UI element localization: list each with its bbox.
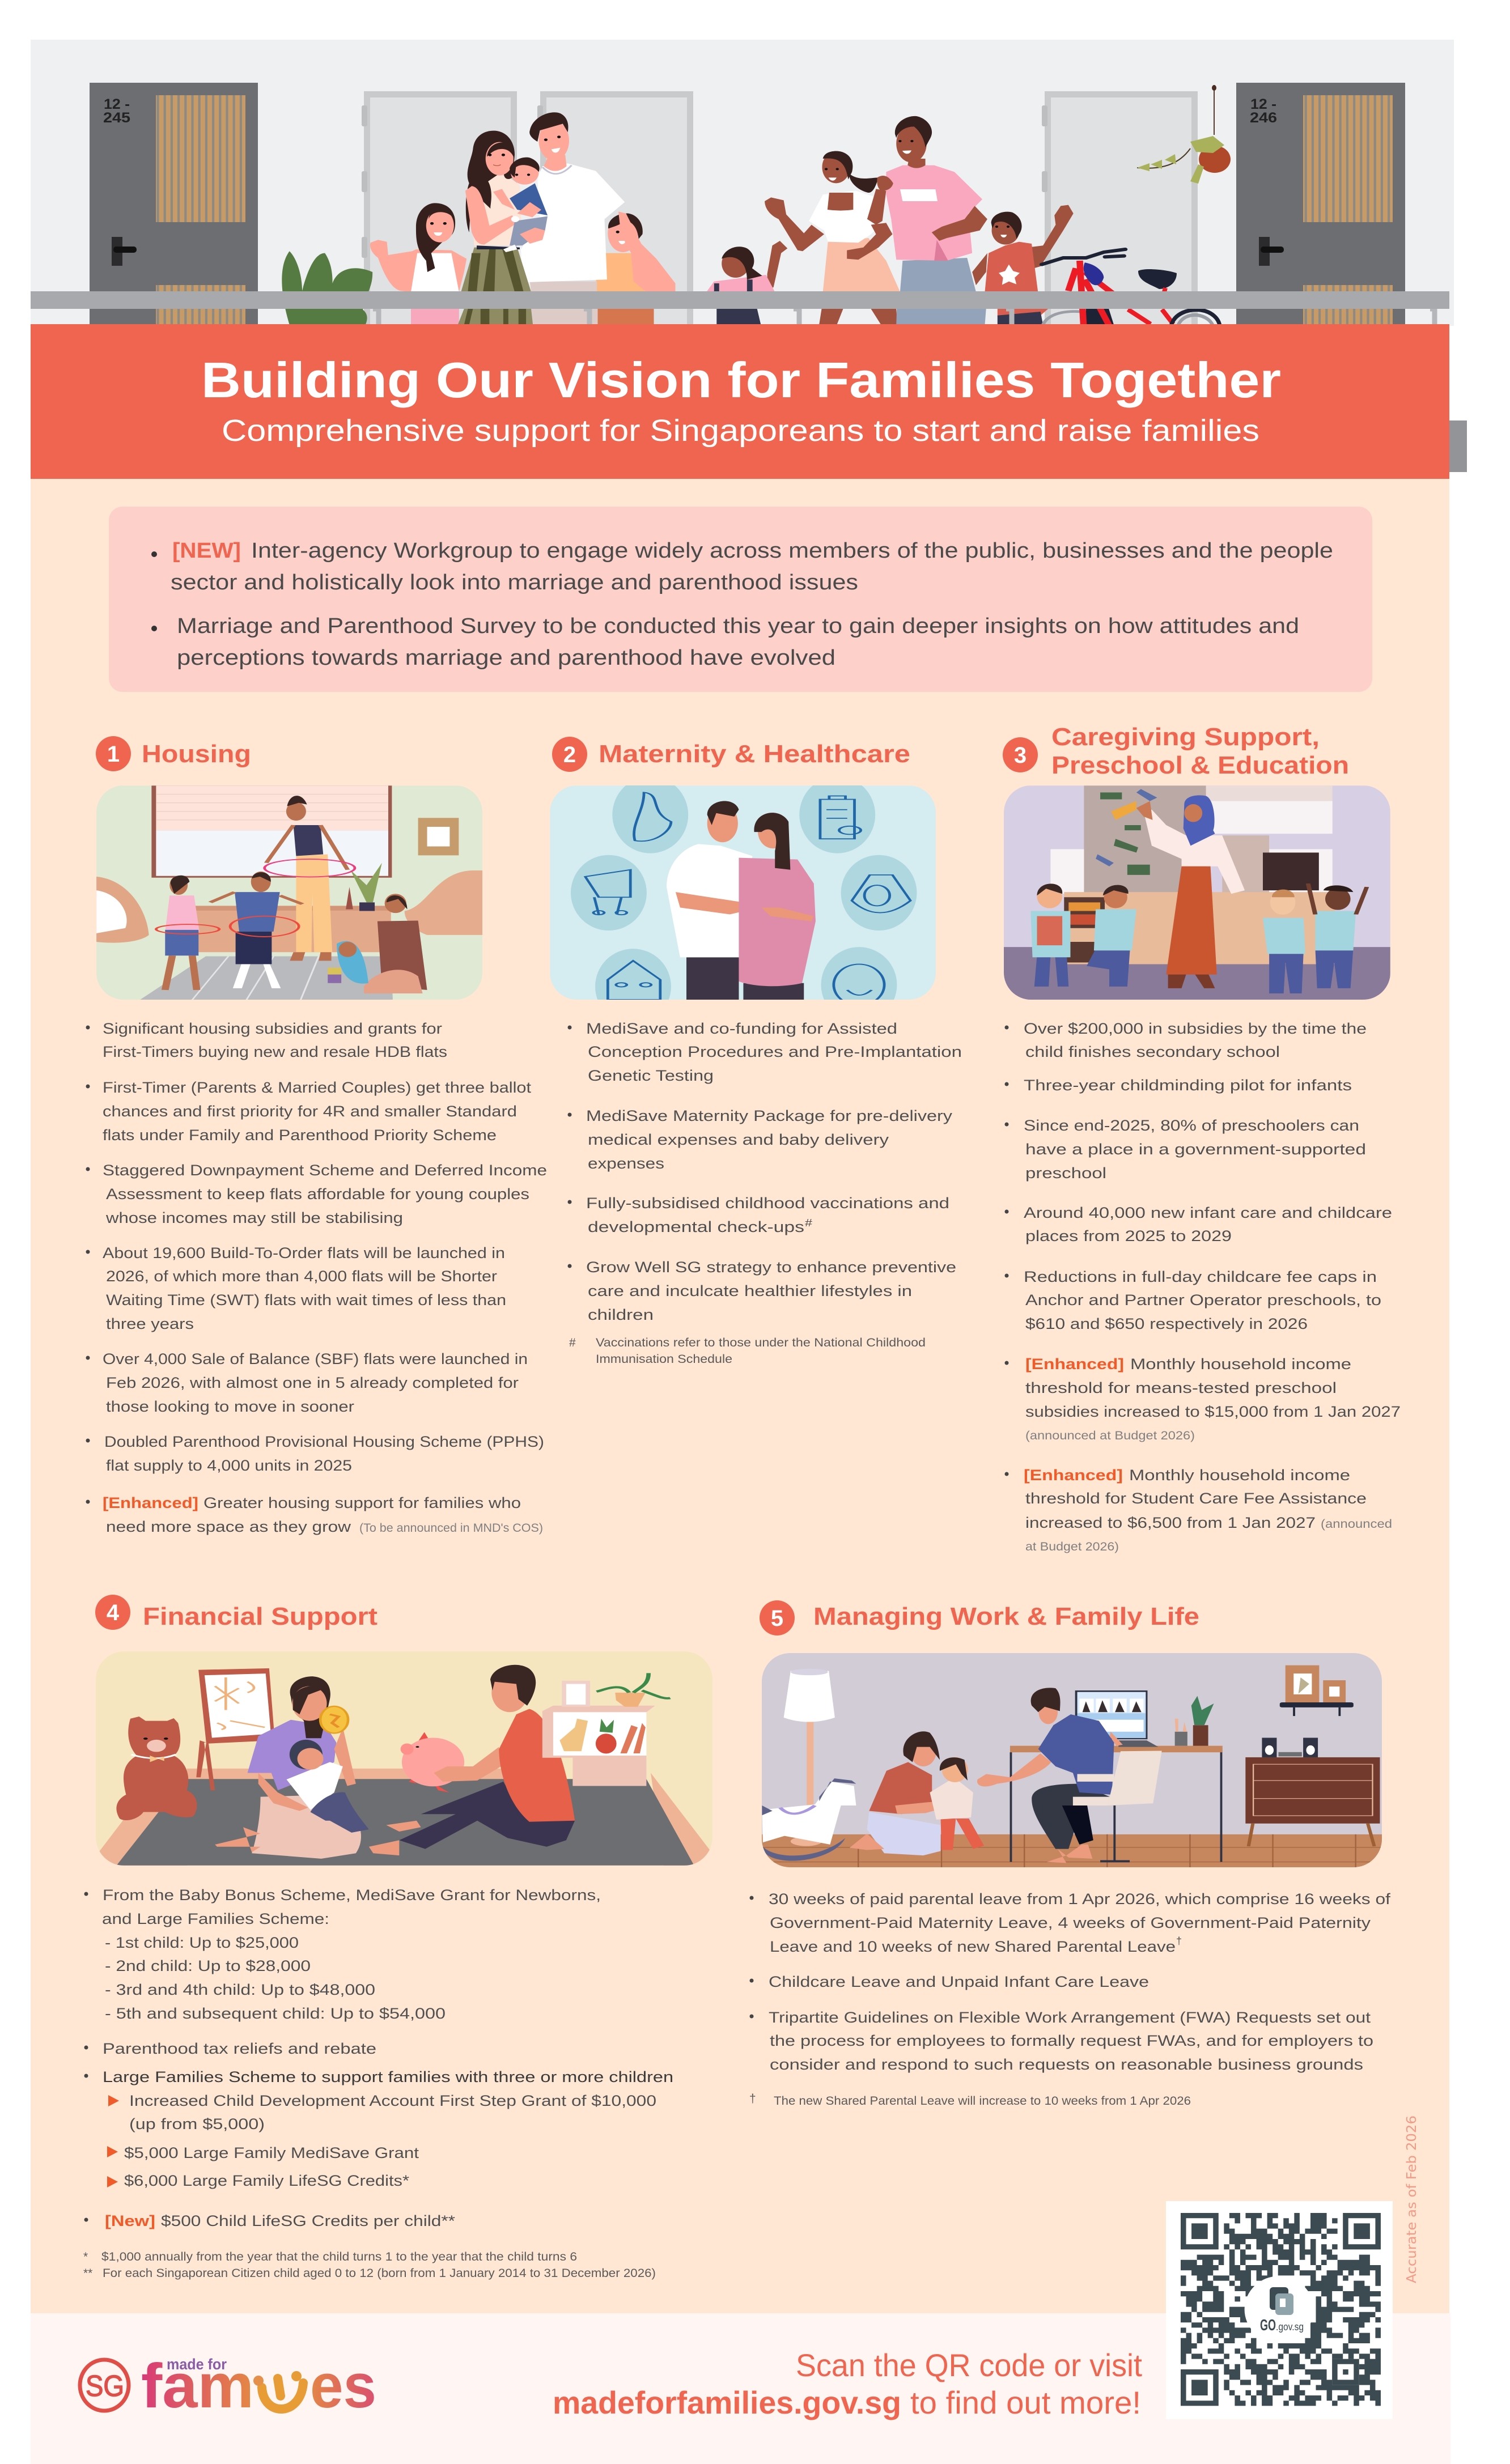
logo: made for families: es <box>310 2351 376 2421</box>
text block: financial support measures: Increased Child Development Account First Step Grant of $10,000 <box>129 2092 656 2109</box>
text block: housing measures: Over 4,000 Sale of Balance (SBF) flats were launched in <box>103 1350 528 1367</box>
text block: work and family measures <box>749 1891 1391 2108</box>
text block: housing measures: First-Timers buying new and resale HDB flats <box>103 1043 447 1060</box>
father <box>399 1782 575 1849</box>
QR code <box>1166 2201 1393 2419</box>
QR code: .gov.sg <box>1276 2321 1304 2333</box>
heading: 5 Managing Work and Family Life <box>760 1600 1199 1635</box>
side tab <box>1449 420 1467 472</box>
door: unit 12-246: 246 <box>1250 110 1277 126</box>
text block: housing measures: First-Timer (Parents & Married Couples) get three ballot <box>103 1079 532 1096</box>
text block: maternity and healthcare measures: Genetic Testing <box>588 1067 714 1084</box>
illustration: expecting couple with healthcare icons <box>550 785 936 1000</box>
corridor wall <box>31 40 1454 326</box>
heading: 1 Housing: 1 <box>107 742 120 767</box>
text block: caregiving, preschool and education measures: Monthly household income <box>1130 1356 1351 1373</box>
panel: new initiatives callout: [NEW] <box>172 539 241 563</box>
panel: new initiatives callout: sector and holistically look into marriage and parenthood issues <box>171 571 858 594</box>
text block: maternity and healthcare measures: MediSave Maternity Package for pre-delivery <box>586 1107 953 1124</box>
door: unit 12-245: 245 <box>103 110 130 126</box>
bear <box>116 1717 197 1820</box>
speakers <box>1262 1737 1276 1757</box>
icon bubbles <box>571 785 917 1000</box>
father at laptop <box>1032 1784 1110 1849</box>
text block: work and family measures: Government-Paid Maternity Leave, 4 weeks of Government-Paid Paternity <box>770 1914 1371 1931</box>
son <box>597 309 654 325</box>
logo: made for families: fam <box>141 2351 254 2421</box>
door: unit 12-246: 12 - <box>1250 96 1276 112</box>
logo: made for families: made for <box>167 2356 227 2373</box>
shelf and frames <box>1280 1702 1354 1707</box>
text block: caregiving, preschool and education measures: Over $200,000 in subsidies by the time the <box>1024 1020 1367 1037</box>
text block: financial support measures: and Large Families Scheme: <box>102 1910 329 1927</box>
father <box>896 258 986 325</box>
text block: maternity and healthcare measures: Conception Procedures and Pre-Implantation <box>588 1043 962 1060</box>
easel <box>196 1740 215 1790</box>
text block: financial support measures: - 5th and subsequent child: Up to $54,000 <box>105 2005 446 2022</box>
text block: maternity and healthcare measures: MediSave and co-funding for Assisted <box>586 1020 897 1037</box>
text block: caregiving, preschool and education measures: child finishes secondary school <box>1025 1043 1280 1060</box>
balcony railing <box>31 291 1449 309</box>
text block: caregiving, preschool and education measures: Monthly household income <box>1129 1467 1350 1484</box>
text block: financial support measures: $5,000 Large Family MediSave Grant <box>124 2144 419 2161</box>
door: unit 12-246 <box>1236 83 1405 326</box>
text block: financial support measures: Large Families Scheme to support families with three or more children <box>103 2068 673 2085</box>
text block: housing measures: About 19,600 Build-To-Order flats will be launched in <box>103 1244 505 1261</box>
heading: 5 Managing Work and Family Life: Managing Work & Family Life <box>813 1603 1199 1630</box>
text block: housing measures: flats under Family and Parenthood Priority Scheme <box>103 1127 497 1144</box>
text block: financial support measures: - 1st child: Up to $25,000 <box>105 1934 299 1951</box>
text block: caregiving, preschool and education measures: [Enhanced] <box>1024 1467 1123 1484</box>
text block: housing measures: need more space as they grow <box>106 1518 351 1535</box>
text block: housing measures: (To be announced in MND's COS) <box>359 1522 543 1535</box>
text block: work and family measures: The new Shared Parental Leave will increase to 10 weeks from 1 Apr 2026 <box>774 2095 1191 2108</box>
text block: caregiving, preschool and education measures: places from 2025 to 2029 <box>1025 1227 1232 1244</box>
rocking horse <box>762 1782 856 1845</box>
text block: caregiving, preschool and education measures: subsidies increased to $15,000 from 1 Jan 2027 <box>1025 1403 1401 1420</box>
railing posts <box>373 309 1435 326</box>
heading: 4 Financial Support: Financial Support <box>143 1603 378 1630</box>
neighbouring doors <box>362 91 1198 326</box>
leafy plant <box>282 251 372 325</box>
text block: maternity and healthcare measures: developmental check-ups <box>588 1218 804 1235</box>
text block: caregiving, preschool and education measures: Since end-2025, 80% of preschoolers can <box>1024 1117 1359 1134</box>
baby <box>510 216 548 245</box>
desk and chair <box>1010 1746 1223 1752</box>
text block: housing measures: 2026, of which more than 4,000 flats will be Shorter <box>106 1268 497 1285</box>
text block: financial support measures: From the Baby Bonus Scheme, MediSave Grant for Newborns, <box>103 1887 601 1904</box>
text block: financial support measures: - 2nd child: Up to $28,000 <box>105 1957 311 1974</box>
piggy bank <box>409 1732 449 1792</box>
text block: housing measures: three years <box>106 1315 194 1332</box>
younger daughter <box>716 309 761 325</box>
text block: housing measures: whose incomes may still be stabilising <box>105 1209 403 1226</box>
text block: maternity and healthcare measures: # <box>805 1217 812 1229</box>
text block: financial support measures: $1,000 annually from the year that the child turns 1 to the year that the child turns 6 <box>101 2250 577 2263</box>
daughter <box>411 309 459 325</box>
family one: father, mother, baby, daughter, son <box>282 112 675 325</box>
text block: housing measures: Feb 2026, with almost one in 5 already completed for <box>106 1374 519 1391</box>
panel: new initiatives callout: perceptions towards marriage and parenthood have evolved <box>177 646 835 670</box>
heading: 1 Housing: Housing <box>142 740 251 768</box>
heading: 3 Caregiving Support, Preschool and Education: Preschool & Education <box>1051 751 1349 779</box>
pencil holder and plant <box>1175 1732 1187 1746</box>
bicycle <box>1043 312 1098 325</box>
panel: new initiatives callout: Inter-agency Workgroup to engage widely across members of the public, businesses and the people <box>251 539 1333 563</box>
title: Building Our Vision for Families Together <box>201 352 1281 408</box>
text block: work and family measures: Tripartite Guidelines on Flexible Work Arrangement (FWA) Requests set out <box>769 2009 1371 2026</box>
son <box>998 309 1048 316</box>
laptop <box>1075 1690 1147 1739</box>
heading: 4 Financial Support <box>95 1595 378 1630</box>
call to action: Scan the QR code or visit <box>796 2347 1142 2383</box>
text block: caregiving, preschool and education measures <box>1004 1020 1401 1553</box>
text block: financial support measures: $500 Child LifeSG Credits per child** <box>161 2212 456 2229</box>
call to action: madeforfamilies.gov.sg <box>553 2385 901 2420</box>
text block: caregiving, preschool and education measures: Three-year childminding pilot for infants <box>1024 1077 1352 1094</box>
text block: housing measures: Significant housing subsidies and grants for <box>103 1020 442 1037</box>
family two: father, mother, daughter, son, bicycle <box>706 116 1131 325</box>
heading: 1 Housing <box>96 736 251 771</box>
text block: caregiving, preschool and education measures: have a place in a government-supported <box>1025 1141 1366 1158</box>
hero illustration: corridor with two families <box>31 40 1454 326</box>
text block: maternity and healthcare measures <box>568 1020 962 1366</box>
text block: maternity and healthcare measures: Fully-subsidised childhood vaccinations and <box>586 1195 949 1212</box>
dresser <box>1245 1757 1380 1824</box>
QR code: GO <box>1260 2316 1276 2334</box>
heading: 2 Maternity and Healthcare: 2 <box>563 742 576 767</box>
heading: 4 Financial Support: 4 <box>107 1600 120 1625</box>
text block: caregiving, preschool and education measures: threshold for Student Care Fee Assistance <box>1025 1490 1367 1507</box>
floor lamp <box>807 1722 813 1837</box>
text block: caregiving, preschool and education measures: Around 40,000 new infant care and childcare <box>1024 1204 1392 1221</box>
heading: 5 Managing Work and Family Life: 5 <box>771 1606 783 1631</box>
text block: maternity and healthcare measures: Immunisation Schedule <box>596 1353 732 1366</box>
text block: work and family measures: 30 weeks of paid parental leave from 1 Apr 2026, which comprise 16 weeks of <box>769 1891 1391 1908</box>
text block: housing measures: Doubled Parenthood Provisional Housing Scheme (PPHS) <box>104 1433 544 1450</box>
illustration: teacher with preschool children <box>1004 785 1390 1000</box>
text block: work and family measures: the process for employees to formally request FWAs, and for employers to <box>770 2032 1373 2049</box>
text block: maternity and healthcare measures: children <box>588 1306 654 1323</box>
text block: work and family measures: † <box>749 2092 756 2105</box>
text block: financial support measures: For each Singaporean Citizen child aged 0 to 12 (born from 1 January 2014 to 31 December 2026) <box>103 2267 656 2280</box>
text block: financial support measures: ** <box>83 2267 92 2280</box>
text block: housing measures: Waiting Time (SWT) flats with wait times of less than <box>106 1292 506 1309</box>
text block: maternity and healthcare measures: # <box>569 1336 576 1349</box>
text block: caregiving, preschool and education measures: threshold for means-tested preschool <box>1025 1379 1337 1396</box>
text block: work and family measures: † <box>1176 1935 1182 1947</box>
toy shelf <box>542 1706 655 1786</box>
text block: work and family measures: Childcare Leave and Unpaid Infant Care Leave <box>769 1973 1149 1990</box>
door: unit 12-245: 12 - <box>104 96 130 112</box>
text block: caregiving, preschool and education measures: Reductions in full-day childcare fee caps in <box>1024 1268 1377 1285</box>
text block: housing measures: those looking to move in sooner <box>106 1398 354 1415</box>
date note: Accurate as of Feb 2026 <box>1405 2115 1419 2283</box>
mother and child <box>867 1812 941 1855</box>
text block: housing measures: Staggered Downpayment Scheme and Deferred Income <box>103 1162 547 1179</box>
call to action: to find out more! <box>910 2385 1141 2420</box>
desk chair <box>1108 1751 1162 1805</box>
call to action <box>553 2347 1142 2420</box>
logo: made for families: SG <box>86 2370 124 2403</box>
text block: caregiving, preschool and education measures: (announced at Budget 2026) <box>1025 1429 1195 1442</box>
text block: financial support measures: Parenthood tax reliefs and rebate <box>103 2040 376 2057</box>
text block: caregiving, preschool and education measures: [Enhanced] <box>1025 1356 1124 1373</box>
illustration: parents saving with child and piggy bank <box>91 1649 716 1866</box>
text block: housing measures <box>86 1020 547 1535</box>
text block: caregiving, preschool and education measures: at Budget 2026) <box>1025 1540 1119 1553</box>
text block: housing measures: flat supply to 4,000 units in 2025 <box>106 1457 352 1474</box>
mother and child <box>252 1795 361 1859</box>
bicycle saddle, seat post, frame and rear wheel <box>1128 269 1220 326</box>
illustration: family at home with hula hoops <box>96 785 483 1000</box>
heading: 2 Maternity and Healthcare <box>552 737 910 772</box>
text block: work and family measures: consider and respond to such requests on reasonable business grounds <box>770 2056 1363 2073</box>
text block: maternity and healthcare measures: care and inculcate healthier lifestyles in <box>588 1282 912 1299</box>
mother <box>819 309 897 325</box>
logo: made for families <box>80 2351 376 2421</box>
panel: new initiatives callout <box>109 507 1372 692</box>
text block: financial support measures <box>83 1887 673 2280</box>
heading: 3 Caregiving Support, Preschool and Education: 3 <box>1014 743 1027 768</box>
page background panel <box>31 479 1449 2315</box>
text block: maternity and healthcare measures: Grow Well SG strategy to enhance preventive <box>586 1259 956 1276</box>
subtitle: Comprehensive support for Singaporeans to start and raise families <box>222 414 1259 448</box>
text block: housing measures: chances and first priority for 4R and smaller Standard <box>103 1103 517 1120</box>
text block: financial support measures: * <box>83 2250 88 2263</box>
footer band <box>31 2313 1450 2464</box>
title banner <box>31 324 1449 479</box>
text block: caregiving, preschool and education measures: Anchor and Partner Operator preschools, to <box>1025 1292 1381 1309</box>
father <box>530 282 597 325</box>
hanging plant <box>1137 85 1231 184</box>
text block: work and family measures: Leave and 10 weeks of new Shared Parental Leave <box>770 1938 1176 1955</box>
illustration: parent working from home with family <box>758 1651 1388 1869</box>
text block: caregiving, preschool and education measures: $610 and $650 respectively in 2026 <box>1025 1315 1308 1332</box>
text block: maternity and healthcare measures: Vaccinations refer to those under the National Childhood <box>596 1336 926 1349</box>
text block: financial support measures: [New] <box>105 2212 155 2229</box>
text block: financial support measures: - 3rd and 4th child: Up to $48,000 <box>105 1981 375 1998</box>
text block: caregiving, preschool and education measures: (announced <box>1321 1518 1392 1531</box>
text block: maternity and healthcare measures: expenses <box>588 1155 664 1172</box>
door: unit 12-245 <box>90 83 258 326</box>
text block: caregiving, preschool and education measures: increased to $6,500 from 1 Jan 2027 <box>1025 1514 1316 1531</box>
text block: housing measures: Greater housing support for families who <box>203 1494 521 1511</box>
text block: housing measures: Assessment to keep flats affordable for young couples <box>106 1186 529 1203</box>
heading: 3 Caregiving Support, Preschool and Education: Caregiving Support, <box>1051 723 1320 751</box>
heading: 2 Maternity and Healthcare: Maternity & Healthcare <box>599 740 910 768</box>
text block: housing measures: [Enhanced] <box>103 1494 198 1511</box>
heading: 3 Caregiving Support, Preschool and Education <box>1003 723 1349 779</box>
panel: new initiatives callout: Marriage and Parenthood Survey to be conducted this year to gain deeper insights on how attitudes and <box>177 614 1299 638</box>
text block: financial support measures: $6,000 Large Family LifeSG Credits* <box>124 2172 410 2189</box>
text block: maternity and healthcare measures: medical expenses and baby delivery <box>588 1131 889 1148</box>
text block: financial support measures: (up from $5,000) <box>129 2115 265 2132</box>
mother <box>458 248 533 325</box>
text block: caregiving, preschool and education measures: preschool <box>1025 1165 1106 1182</box>
